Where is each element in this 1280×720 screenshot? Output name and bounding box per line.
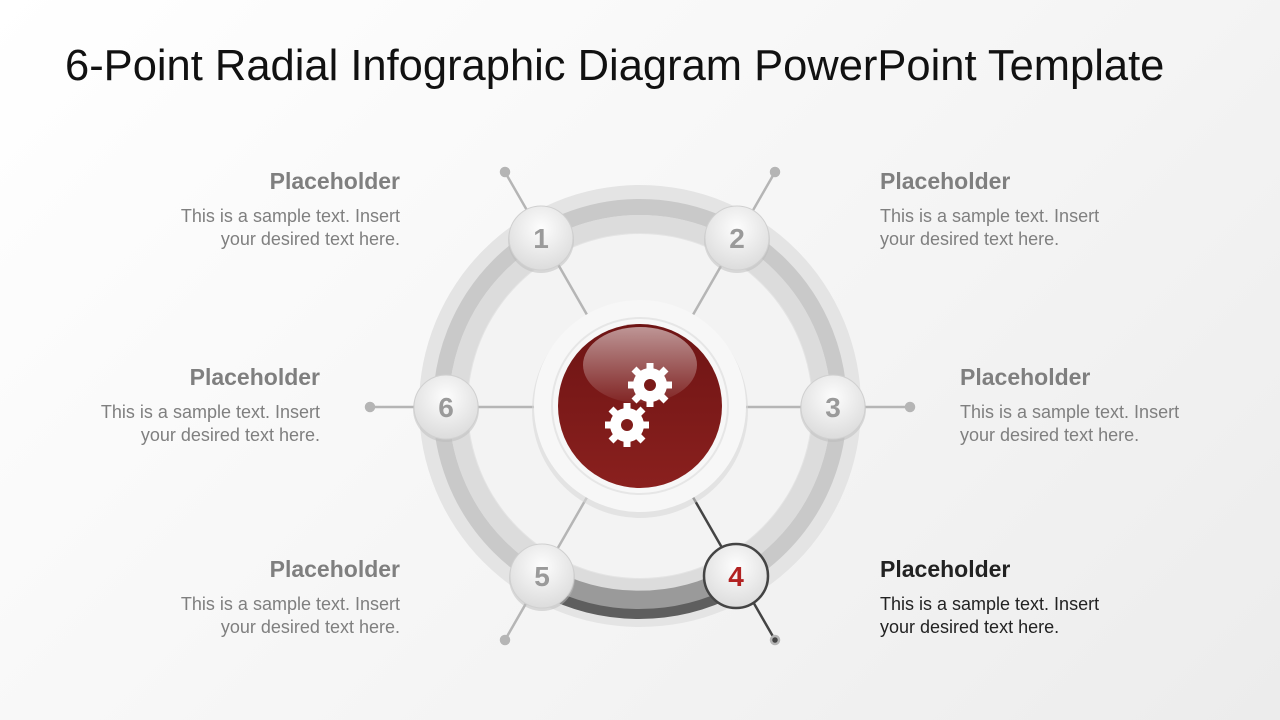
- text: point 1: Placeholder: [270, 168, 400, 194]
- text: point 5: This is a sample text. Insert: [181, 594, 400, 614]
- ring: [419, 185, 861, 627]
- text: point 3: your desired text here.: [960, 425, 1139, 445]
- text: point 6: your desired text here.: [141, 425, 320, 445]
- text: point 3: [960, 364, 1179, 445]
- text: point 2: This is a sample text. Insert: [880, 206, 1099, 226]
- text: point 1: This is a sample text. Insert: [181, 206, 400, 226]
- text: point 5: Placeholder: [270, 556, 400, 582]
- nodes: 1: [533, 223, 549, 254]
- nodes: 4: [728, 561, 744, 592]
- text: point 3: Placeholder: [960, 364, 1090, 390]
- title: 6-Point Radial Infographic Diagram PowerPoint Template: [65, 42, 1164, 90]
- text: point 2: [880, 168, 1099, 249]
- nodes: [413, 206, 866, 611]
- nodes: 6: [438, 392, 454, 423]
- text: point 3: This is a sample text. Insert: [960, 402, 1179, 422]
- center hub with gear icon: [532, 300, 748, 518]
- text: point 6: Placeholder: [190, 364, 320, 390]
- text: point 6: This is a sample text. Insert: [101, 402, 320, 422]
- text: point 2: Placeholder: [880, 168, 1010, 194]
- nodes: 2: [729, 223, 745, 254]
- text: point 4: [880, 556, 1099, 637]
- text: point 1: [181, 168, 400, 249]
- text: point 4: This is a sample text. Insert: [880, 594, 1099, 614]
- icon: gears: [605, 363, 672, 447]
- text: point 4: your desired text here.: [880, 617, 1059, 637]
- nodes: 3: [825, 392, 841, 423]
- text: point 5: [181, 556, 400, 637]
- nodes: 5: [534, 561, 550, 592]
- text: point 4: Placeholder: [880, 556, 1010, 582]
- text: point 6: [101, 364, 320, 445]
- spokes: [366, 168, 914, 644]
- text: point 1: your desired text here.: [221, 229, 400, 249]
- text: point 2: your desired text here.: [880, 229, 1059, 249]
- text: point 5: your desired text here.: [221, 617, 400, 637]
